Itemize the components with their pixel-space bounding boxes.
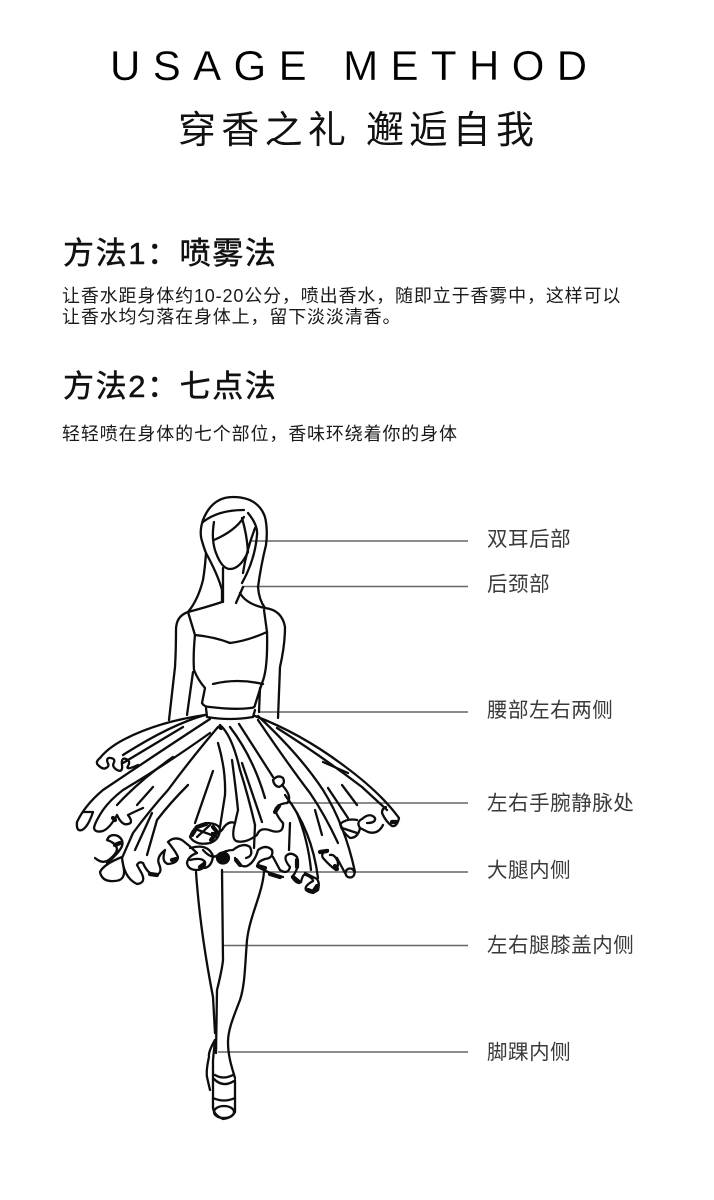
label: inner ankle: 脚踝内侧 bbox=[487, 1041, 571, 1064]
heading: method 1: 方法1：喷雾法 bbox=[63, 236, 277, 271]
text: method 1 description: 让香水均匀落在身体上，留下淡淡清香。 bbox=[62, 307, 401, 327]
label: both sides of waist: 腰部左右两侧 bbox=[487, 699, 613, 722]
label: inner thigh: 大腿内侧 bbox=[487, 859, 571, 882]
text: method 2 description: 轻轻喷在身体的七个部位，香味环绕着你的身体 bbox=[62, 424, 458, 444]
label: back of neck: 后颈部 bbox=[487, 573, 550, 596]
subtitle: 穿香之礼 邂逅自我 bbox=[178, 110, 539, 152]
figure: shoe bbox=[207, 1040, 235, 1119]
figure: head and hair bbox=[188, 497, 267, 612]
figure: woman bbox=[77, 497, 399, 1119]
figure: skirt shadow folds bbox=[113, 727, 396, 892]
skirt: ball ruffle bbox=[190, 823, 220, 844]
skirt: hem ruffles centre bbox=[190, 847, 213, 868]
skirt: pleats centre bbox=[195, 771, 213, 823]
text: method 1 description bbox=[62, 286, 621, 327]
label: wrist veins: 左右手腕静脉处 bbox=[487, 792, 634, 815]
skirt: pleats left bbox=[77, 719, 210, 830]
skirt: wrist loop and front drape bbox=[273, 776, 284, 787]
skirt: hem ruffles right bbox=[280, 854, 319, 892]
title: USAGE METHOD bbox=[110, 42, 600, 89]
skirt: pleats right bbox=[255, 716, 399, 826]
figure: legs bbox=[196, 870, 264, 1078]
skirt: upper left ruffle bbox=[97, 715, 205, 771]
heading: method 2: 方法2：七点法 bbox=[63, 369, 277, 404]
skirt: hem ruffles left bbox=[95, 835, 122, 863]
label: behind both ears: 双耳后部 bbox=[487, 528, 571, 551]
leader lines bbox=[218, 541, 468, 1052]
figure: torso and arms bbox=[169, 587, 285, 720]
label: inner knees: 左右腿膝盖内侧 bbox=[487, 934, 634, 957]
text: method 1 description: 让香水距身体约10-20公分，喷出香水，随即立于香雾中，这样可以 bbox=[62, 286, 621, 306]
figure: tutu skirt bbox=[77, 715, 399, 892]
